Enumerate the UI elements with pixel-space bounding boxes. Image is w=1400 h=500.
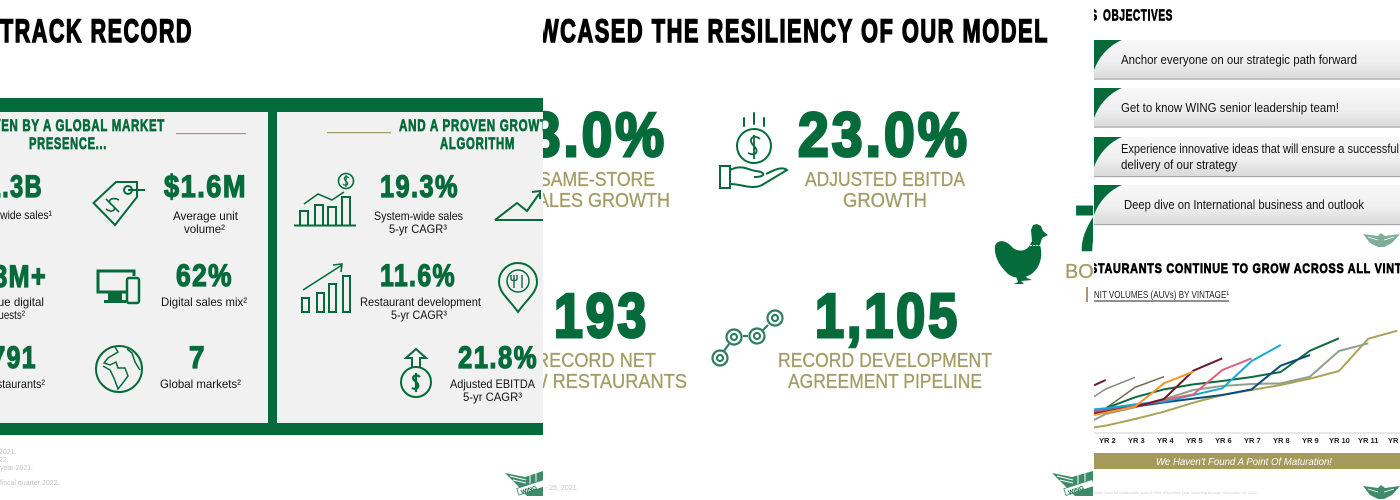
footnote: - 25, 2021.: [545, 485, 579, 492]
logo: wings upper: [1363, 233, 1400, 247]
heading: global market presence: PRESENCE...: [29, 134, 107, 153]
stat: global markets: Global markets²: [160, 377, 241, 391]
title: objectives: OBJECTIVES: [1103, 6, 1173, 24]
stat: record net new restaurants: [543, 292, 686, 388]
icon: growth bars with dollar: [294, 174, 356, 226]
stat: record net new restaurants: RECORD NET: [536, 349, 656, 372]
stat: digital guests: [0, 264, 46, 319]
panel: track record: [0, 13, 557, 496]
logo: wings: [505, 471, 546, 496]
stat: same-store sales growth: SAME-STORE: [539, 168, 655, 191]
footnotes: fiscal quarter 2022.: [0, 480, 60, 487]
heading: proven growth algorithm: AND A PROVEN GROWTH: [399, 116, 557, 135]
stat: same-store sales growth: [543, 110, 669, 208]
stat: restaurant development CAGR: 5-yr CAGR³: [391, 308, 447, 322]
stat: record development pipeline: RECORD DEVELOPMENT: [778, 349, 992, 372]
stat: average unit volume: Average unit: [173, 209, 239, 223]
footnotes: [0, 449, 60, 487]
objective bar 4: [1094, 185, 1400, 225]
subheading: average unit volumes by vintage: UNIT VOLUMES (AUVs) BY VINTAGE¹: [1088, 289, 1229, 301]
stat: same-store sales growth: 3.0%: [530, 101, 667, 170]
stat: restaurant development CAGR: 11.6%: [380, 259, 456, 293]
objective bar 2: Get to know WING senior leadership team!: [1121, 101, 1339, 115]
stat: system-wide sales: [0, 174, 52, 219]
heading: proven growth algorithm: [327, 119, 543, 150]
logo: wings lower: [1363, 485, 1400, 499]
icon: globe: [96, 346, 142, 392]
stat: boneless wings, clipped: BONE-IN WINGS: [1065, 260, 1220, 283]
logo: wings: WING: [521, 485, 538, 496]
objective bar 1: [1094, 40, 1400, 80]
logo: wings: [1052, 471, 1095, 496]
green frame: [0, 98, 543, 435]
icon: rising arrow: [495, 191, 543, 220]
stat: boneless wings, clipped: 7: [1075, 195, 1109, 264]
stat: record net new restaurants: NEW RESTAURANTS: [505, 370, 687, 393]
stat: restaurants: [0, 346, 45, 388]
stat: digital sales mix: [162, 264, 247, 308]
icon: digital devices: [98, 271, 139, 303]
line chart: AUVs by vintage: YR 8: [1273, 436, 1290, 445]
stat: average unit volume: [164, 173, 244, 233]
line chart: AUVs by vintage: YR 4: [1157, 436, 1175, 445]
stat: global markets: [160, 346, 241, 388]
stat: average unit volume: $1.6M: [164, 170, 247, 204]
title: resiliency: WCASED THE RESILIENCY OF OUR MODEL: [538, 13, 1049, 49]
line chart: AUVs by vintage: YR 11: [1358, 436, 1378, 445]
stat: adjusted EBITDA growth: 23.0%: [798, 101, 970, 170]
banner: point of maturation: We Haven't Found A Point Of Maturation!: [1156, 456, 1332, 468]
stat: restaurant development CAGR: Restaurant development: [360, 295, 482, 309]
stat: system-wide sales CAGR: 5-yr CAGR³: [389, 222, 447, 236]
stat: record development pipeline: AGREEMENT PIPELINE: [788, 370, 982, 393]
stat: adjusted EBITDA CAGR: 5-yr CAGR³: [463, 390, 522, 404]
stat: adjusted EBITDA growth: ADJUSTED EBITDA: [805, 168, 965, 191]
icon: development chain: [712, 310, 782, 366]
stat: adjusted EBITDA CAGR: 21.8%: [458, 341, 538, 375]
line chart: AUVs by vintage: YR 10: [1329, 436, 1350, 445]
stat: record development pipeline: 1,105: [815, 282, 960, 351]
icon: restaurant pin: [499, 263, 537, 312]
stat: digital sales mix: Digital sales mix²: [161, 295, 247, 309]
stat: adjusted EBITDA growth: [798, 110, 967, 208]
stat: adjusted EBITDA growth: GROWTH: [843, 189, 927, 212]
objective bar 2: [1094, 88, 1400, 128]
stat: boneless wings, clipped: [1066, 206, 1093, 302]
objective bar 3: delivery of our strategy: [1121, 158, 1238, 172]
footnotes: year 2021.: [0, 465, 33, 472]
stat: system-wide sales CAGR: [374, 170, 463, 236]
stat: record development pipeline: [779, 292, 992, 388]
stat: restaurant development CAGR: [360, 259, 482, 322]
banner: point of maturation: [1094, 453, 1400, 469]
line chart: AUVs by vintage: YR 6: [1215, 436, 1232, 445]
footnote: Note: Data for restaurants open in their respective year, including through December 25, 2021.: [1094, 490, 1258, 495]
line chart: AUVs by vintage: YR 7: [1244, 436, 1261, 445]
line chart: AUVs by vintage: YR 2: [1099, 436, 1116, 445]
objective bar 3: [1094, 137, 1400, 177]
icon: chicken: [995, 224, 1048, 284]
icon: price tag: [94, 182, 145, 225]
logo: wings: WING: [1068, 486, 1085, 496]
line chart: AUVs by vintage: YR 9: [1302, 436, 1319, 445]
stat: adjusted EBITDA CAGR: [450, 341, 538, 404]
heading: proven growth algorithm: ALGORITHM: [440, 134, 515, 153]
panel: objectives and vintage chart: [1088, 6, 1400, 499]
stat: global markets: 7: [189, 341, 206, 375]
heading: global market presence: [0, 119, 246, 150]
stat: adjusted EBITDA CAGR: Adjusted EBITDA: [450, 377, 535, 391]
icon: bars with arrow: [302, 264, 350, 312]
panel: resiliency of our model: [543, 18, 1093, 496]
objective bar 4: Deep dive on International business and outlook: [1124, 198, 1365, 212]
line chart: AUVs by vintage: YR 3: [1128, 436, 1145, 445]
objective bar 1: Anchor everyone on our strategic path forward: [1121, 53, 1357, 67]
icon: hand with coin: [720, 113, 787, 188]
title: track record: TRACK RECORD: [0, 13, 193, 49]
stat: average unit volume: volume²: [184, 222, 225, 236]
stat: same-store sales growth: SALES GROWTH: [525, 189, 670, 212]
right inner card: [277, 112, 543, 423]
stat: record net new restaurants: 193: [554, 282, 649, 351]
stat: system-wide sales CAGR: System-wide sales: [374, 209, 463, 223]
line chart: AUVs by vintage: YR 5: [1186, 436, 1203, 445]
left inner card: [0, 112, 268, 423]
icon: money bag with up arrow: [401, 349, 431, 397]
line chart: AUVs by vintage: [1094, 331, 1400, 445]
stat: digital sales mix: 62%: [176, 259, 233, 293]
title: objectives: S: [1089, 6, 1098, 24]
stat: system-wide sales CAGR: 19.3%: [380, 170, 459, 204]
